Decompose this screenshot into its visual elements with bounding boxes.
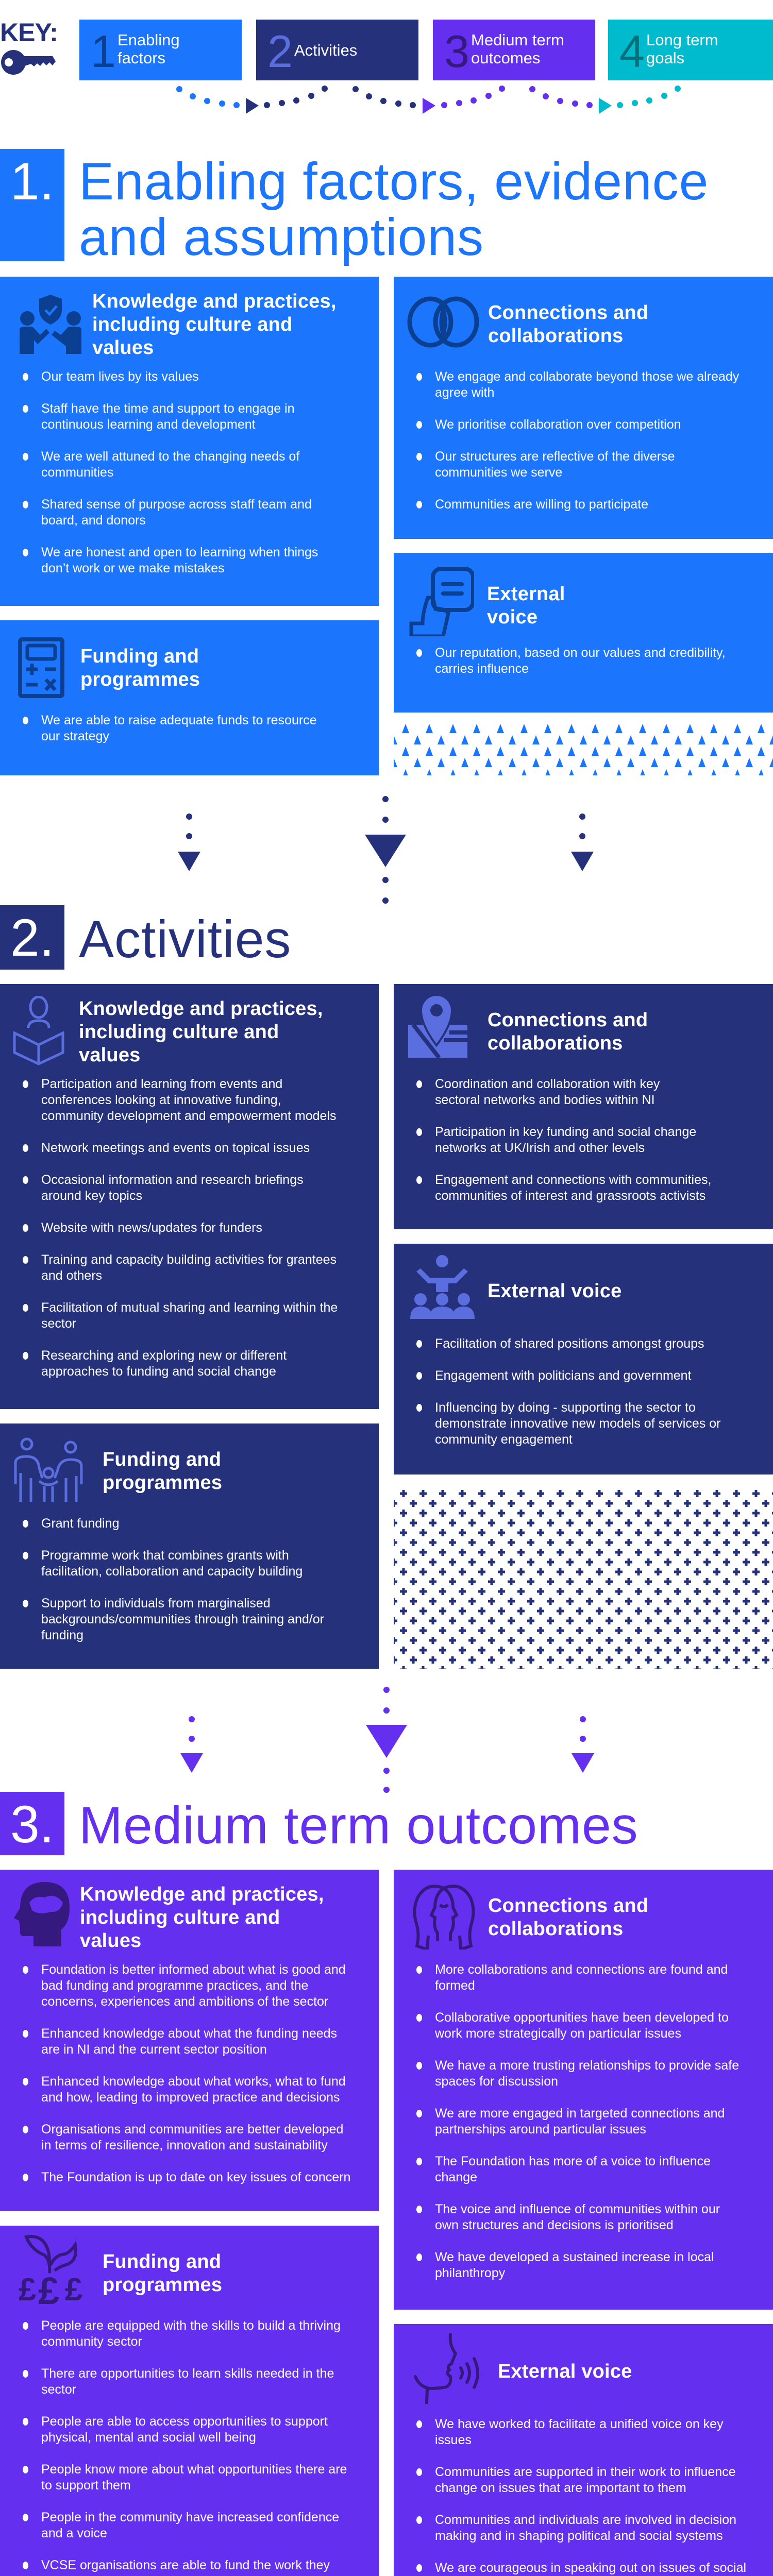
icon: reader	[13, 996, 64, 1065]
bullets: conferences looking at innovative funding,	[41, 1093, 281, 1107]
bullets: Communities are supported in their work to influence	[435, 2465, 736, 2479]
bullets: communities of interest and grassroots activists	[435, 1189, 705, 1203]
bullets	[416, 646, 726, 676]
heading: collaborations	[488, 1032, 623, 1054]
panel: s1 connections	[394, 277, 773, 539]
key box 3: Medium term	[471, 31, 564, 49]
bullets: community sector	[41, 2334, 142, 2349]
key box 2: Activities	[294, 41, 357, 59]
panel: s2 connections	[394, 984, 773, 1229]
bullets: our strategy	[41, 729, 109, 743]
bullets: More collaborations and connections are found and	[435, 1962, 728, 1977]
key box 4: 4	[619, 26, 645, 77]
bullets: philanthropy	[435, 2266, 505, 2280]
icon: family	[14, 1437, 82, 1502]
heading	[103, 2251, 222, 2296]
bullets: Grant funding	[41, 1516, 120, 1531]
section 2 title: Activities	[79, 910, 291, 969]
bullets: Staff have the time and support to engage in	[41, 401, 295, 416]
pattern s2	[394, 1490, 773, 1669]
heading: including culture and	[80, 1907, 280, 1928]
panel: s1 funding	[0, 620, 379, 775]
heading: External	[487, 583, 565, 605]
heading	[488, 302, 648, 347]
bullets: Participation in key funding and social change	[435, 1125, 696, 1139]
key box 1: Enabling	[117, 31, 180, 49]
heading: External voice	[498, 2361, 632, 2382]
panel: s1 external voice	[394, 553, 773, 713]
heading: Knowledge and practices,	[80, 1884, 324, 1905]
key label: KEY:	[0, 18, 58, 47]
bullets: spaces for discussion	[435, 2074, 558, 2089]
section 2 number	[0, 905, 64, 970]
heading: values	[92, 337, 154, 359]
bullets	[23, 2318, 347, 2576]
bullets: Shared sense of purpose across staff team and	[41, 497, 312, 512]
key box 4: goals	[646, 49, 684, 67]
bullets: work more strategically on particular issues	[435, 2026, 681, 2041]
bullets: Our structures are reflective of the diverse	[435, 449, 675, 464]
bullets: Occasional information and research briefings	[41, 1173, 304, 1187]
bullets	[23, 1516, 324, 1642]
bullets: Participation and learning from events and	[41, 1077, 282, 1091]
section 2 number: 2.	[10, 908, 54, 967]
panel: s2 funding	[0, 1423, 379, 1669]
bullets: partnerships around particular issues	[435, 2122, 646, 2137]
heading	[487, 583, 565, 628]
key box 1: 1	[91, 26, 116, 77]
panel: s3 knowledge	[0, 1870, 379, 2211]
heading	[92, 291, 337, 359]
bullets	[23, 369, 318, 575]
bullets	[416, 1077, 711, 1203]
bullets: change on issues that are important to them	[435, 2481, 686, 2495]
bullets: Our reputation, based on our values and credibility,	[435, 646, 726, 660]
bullets: Network meetings and events on topical issues	[41, 1141, 310, 1155]
section 1 title: and assumptions	[79, 208, 484, 266]
heading	[80, 1884, 324, 1952]
bullets: facilitation, collaboration and capacity building	[41, 1564, 303, 1579]
bullets: funding	[41, 1628, 83, 1642]
bullets: Coordination and collaboration with key	[435, 1077, 660, 1091]
bullets: agree with	[435, 385, 494, 400]
bullets: Researching and exploring new or different	[41, 1348, 287, 1363]
bullets: Communities are willing to participate	[435, 497, 648, 512]
heading: programmes	[80, 669, 200, 690]
bullets: The voice and influence of communities within our	[435, 2202, 720, 2216]
heading: Funding and	[80, 646, 199, 667]
bullets: We prioritise collaboration over competition	[435, 417, 681, 432]
heading: programmes	[103, 2274, 222, 2296]
key box 2: 2	[267, 26, 293, 77]
bullets: We are able to raise adequate funds to resource	[41, 713, 317, 727]
bullets: are in NI and the current sector position	[41, 2042, 267, 2057]
heading	[488, 1895, 648, 1940]
bullets: community engagement	[435, 1432, 573, 1447]
section 3 number	[0, 1792, 64, 1855]
bullets: Influencing by doing - supporting the sector to	[435, 1400, 696, 1415]
section 3 title: Medium term outcomes	[79, 1796, 638, 1855]
bullets: Our team lives by its values	[41, 369, 199, 384]
bullets: People are equipped with the skills to build a thriving	[41, 2318, 341, 2333]
key box 3: outcomes	[471, 49, 540, 67]
bullets: sector	[41, 2382, 76, 2397]
bullets: We engage and collaborate beyond those we already	[435, 369, 739, 384]
icon: growing pounds	[19, 2235, 82, 2304]
bullets: formed	[435, 1978, 475, 1993]
bullets: change	[435, 2170, 477, 2184]
bullets: Organisations and communities are better developed	[41, 2122, 343, 2137]
section 1 number: 1.	[10, 152, 54, 211]
section 3 number: 3.	[10, 1795, 54, 1854]
bullets: We are well attuned to the changing needs of	[41, 449, 299, 464]
key box 3	[433, 20, 595, 80]
bullets	[416, 369, 739, 512]
bullets: We are courageous in speaking out on issues of social	[435, 2561, 746, 2575]
heading: Knowledge and practices,	[79, 998, 323, 1020]
panel: s1 knowledge	[0, 277, 379, 606]
bullets: don’t work or we make mistakes	[41, 561, 225, 575]
bullets: making and in shaping political and social systems	[435, 2529, 723, 2543]
icon: key	[1, 50, 56, 75]
heading: Connections and	[488, 302, 648, 324]
bullets: Collaborative opportunities have been developed to	[435, 2010, 729, 2025]
heading: Knowledge and practices,	[92, 291, 337, 312]
bullets	[23, 713, 317, 743]
arrows s2 to s3	[180, 1687, 594, 1793]
heading: voice	[487, 606, 537, 628]
icon: head	[14, 1882, 70, 1946]
bullets: Enhanced knowledge about what the funding needs	[41, 2026, 337, 2041]
heading	[80, 646, 200, 690]
icon: speaker audience	[410, 1255, 475, 1319]
bullets: sector	[41, 1316, 76, 1331]
bullets: own structures and decisions is prioritised	[435, 2218, 674, 2232]
bullets: and a voice	[41, 2526, 107, 2540]
bullets: People know more about what opportunities there are	[41, 2462, 347, 2477]
bullets: approaches to funding and social change	[41, 1364, 276, 1379]
heading: values	[80, 1930, 142, 1952]
bullets: to support them	[41, 2478, 131, 2493]
bullets: Foundation is better informed about what is good and	[41, 1962, 346, 1977]
key box 3: 3	[444, 26, 469, 77]
bullets	[416, 1962, 739, 2280]
bullets: We are honest and open to learning when things	[41, 545, 318, 560]
heading: collaborations	[488, 1918, 624, 1940]
bullets: concerns, experiences and ambitions of the sector	[41, 1994, 328, 2009]
panel: s3 external voice	[394, 2324, 773, 2576]
pattern s1	[394, 724, 773, 775]
bullets: communities	[41, 465, 113, 480]
bullets: We have a more trusting relationships to provide safe	[435, 2058, 739, 2073]
heading	[488, 1009, 648, 1054]
section 1 title: Enabling factors, evidence	[79, 152, 709, 211]
panel: s3 funding	[0, 2226, 379, 2576]
heading: values	[79, 1044, 141, 1066]
bullets: and others	[41, 1268, 102, 1283]
bullets: Facilitation of mutual sharing and learning within the	[41, 1300, 338, 1315]
section 1 title	[79, 152, 709, 266]
bullets	[416, 1336, 720, 1447]
bullets: Engagement and connections with communities,	[435, 1173, 711, 1187]
bullets: We are more engaged in targeted connections and	[435, 2106, 725, 2121]
heading: External voice	[488, 1280, 621, 1302]
bullets: We have developed a sustained increase in local	[435, 2250, 714, 2264]
bullets: Website with news/updates for funders	[41, 1221, 262, 1235]
key box 4	[608, 20, 773, 80]
heading: including culture and	[79, 1021, 279, 1043]
heading	[103, 1449, 222, 1494]
heading: programmes	[103, 1472, 222, 1494]
bullets: issues	[435, 2433, 472, 2447]
heading: Connections and	[488, 1895, 648, 1917]
bullets: around key topics	[41, 1189, 142, 1203]
heading: collaborations	[488, 325, 624, 347]
panel: s2 knowledge	[0, 984, 379, 1409]
bullets: We have worked to facilitate a unified voice on key	[435, 2417, 724, 2431]
heading: including culture and	[92, 314, 292, 335]
bullets: backgrounds/communities through training and/or	[41, 1612, 324, 1626]
section 1 number	[0, 149, 64, 261]
key box 1	[79, 20, 242, 80]
bullets: VCSE organisations are able to fund the work they	[41, 2558, 330, 2572]
bullets: continuous learning and development	[41, 417, 256, 432]
bullets: community development and empowerment models	[41, 1109, 336, 1123]
icon: interlocking rings	[407, 297, 479, 347]
bullets	[23, 1962, 350, 2184]
heading: Funding and	[103, 2251, 221, 2273]
bullets: sectoral networks and bodies within NI	[435, 1093, 655, 1107]
bullets: There are opportunities to learn skills needed in the	[41, 2366, 334, 2381]
bullets: Facilitation of shared positions amongst groups	[435, 1336, 704, 1351]
key box 1: factors	[117, 49, 165, 67]
bullets	[394, 2416, 746, 2576]
bullets: and how, leading to improved practice and decisions	[41, 2090, 340, 2105]
heading	[79, 998, 323, 1066]
bullets: People are able to access opportunities to support	[41, 2414, 328, 2429]
icon: people shield	[20, 295, 81, 354]
icon: speaking face	[414, 2333, 479, 2404]
icon: map pin	[408, 996, 467, 1058]
key box 2	[256, 20, 418, 80]
bullets: bad funding and programme practices, and the	[41, 1978, 308, 1993]
bullets: People in the community have increased confidence	[41, 2510, 339, 2524]
bullets: physical, mental and social well being	[41, 2430, 256, 2445]
key box 4: Long term	[646, 31, 718, 49]
icon: calculator	[18, 637, 64, 698]
bullets: board, and donors	[41, 513, 146, 528]
bullets: Enhanced knowledge about what works, what to fund	[41, 2074, 346, 2089]
bullets: carries influence	[435, 662, 529, 676]
bullets: demonstrate innovative new models of services or	[435, 1416, 720, 1431]
panel: s2 external voice	[394, 1244, 773, 1475]
bullets: communities we serve	[435, 465, 562, 480]
bullets: Support to individuals from marginalised	[41, 1596, 271, 1611]
arrows s1 to s2	[178, 796, 594, 904]
heading: Funding and	[103, 1449, 221, 1470]
bullets: The Foundation has more of a voice to influence	[435, 2154, 711, 2168]
panel: s3 connections	[394, 1870, 773, 2310]
heading: Connections and	[488, 1009, 648, 1031]
key arrows	[176, 86, 681, 114]
bullets	[23, 1077, 338, 1379]
bullets: Communities and individuals are involved in decision	[435, 2513, 736, 2527]
icon: two faces	[413, 1885, 475, 1950]
icon: hand speech	[409, 567, 474, 636]
bullets: in terms of resilience, innovation and sustainability	[41, 2138, 328, 2153]
bullets: Engagement with politicians and government	[435, 1368, 692, 1383]
bullets: networks at UK/Irish and other levels	[435, 1141, 645, 1155]
bullets: The Foundation is up to date on key issues of concern	[41, 2170, 350, 2184]
bullets: Training and capacity building activities for grantees	[41, 1252, 337, 1267]
bullets: Programme work that combines grants with	[41, 1548, 289, 1563]
